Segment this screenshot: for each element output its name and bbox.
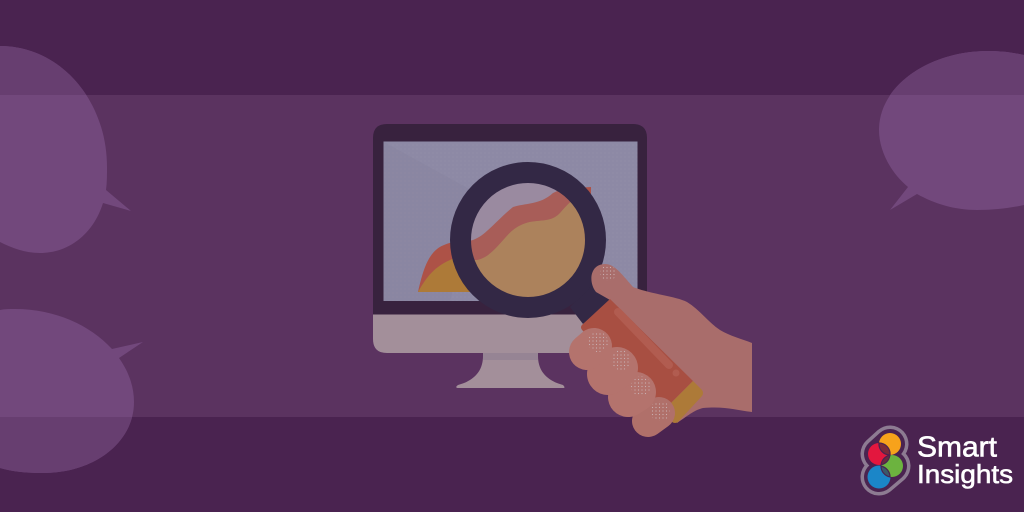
speech bubble: bottom left [0,309,143,473]
monitor stand [456,350,564,388]
thumb highlight [600,265,616,281]
logo: Smart Insights [868,432,1013,489]
screen shading [384,142,480,301]
icon: magnifying glass [460,172,612,324]
grip highlight [618,312,680,376]
handle grip [581,299,693,410]
logo mark [868,433,903,488]
logo wordmark: Insights [917,459,1013,489]
finger 3 [628,376,651,397]
icon: desktop monitor [373,124,647,388]
background: top band [0,0,1024,95]
background: bottom band [0,417,1024,512]
logo wordmark [917,432,1013,489]
monitor chin [373,314,647,353]
magnifier handle [570,283,612,324]
grip end cap [664,381,703,423]
speech bubble: top right [879,51,1024,210]
finger 1 [587,332,608,352]
logo wordmark: Smart [917,432,997,464]
monitor bezel [373,124,647,316]
lens view [471,183,585,297]
speech bubble: top left [0,46,131,253]
hand palm and thumb [591,264,752,423]
finger 2 [608,350,631,374]
area chart [418,187,591,292]
icon: hand holding magnifier [581,264,752,423]
magnifier ring [460,172,596,308]
finger 4 [648,401,670,421]
monitor screen [384,142,638,301]
